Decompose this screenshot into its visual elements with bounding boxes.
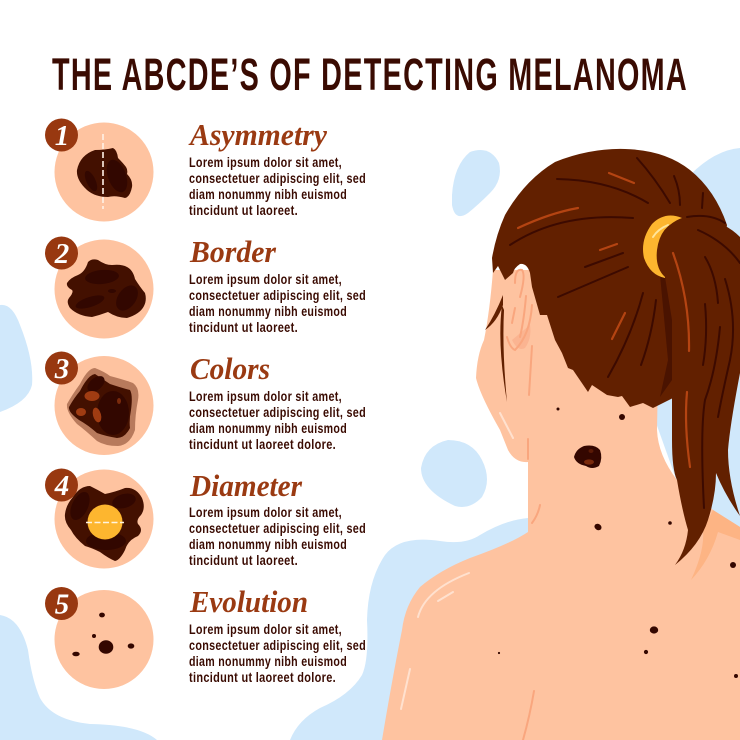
badge 5: 5 [55,588,69,620]
text block 4: tincidunt ut laoreet. [189,552,298,568]
panel: diameter [45,468,366,568]
text block 3: Lorem ipsum dolor sit amet, [189,388,342,404]
body skin [382,270,740,740]
text block 1: consectetuer adipiscing elit, sed [189,170,366,186]
main hair [492,149,727,408]
heading: colors: Colors [190,351,270,386]
text block 4 [189,504,366,568]
text block 3: diam nonummy nibh euismod [189,420,347,436]
skin circle 5 [54,590,154,689]
mole 2 [67,259,146,318]
moles 5 [72,613,134,656]
woman illustration [382,149,740,740]
text block 2: tincidunt ut laoreet. [189,319,298,335]
heading: border: Border [189,234,277,269]
hair shadow [660,275,677,397]
badge 5 [45,587,78,620]
text block 5: Lorem ipsum dolor sit amet, [189,621,342,637]
text block 2: Lorem ipsum dolor sit amet, [189,271,342,287]
text block 2: diam nonummy nibh euismod [189,303,347,319]
text block 5: diam nonummy nibh euismod [189,653,347,669]
badge 4 [45,468,78,502]
skin lines [507,270,540,740]
skin highlights [401,413,513,709]
mole 4 [65,486,144,561]
text block 1: Lorem ipsum dolor sit amet, [189,154,342,170]
symmetry line [102,134,104,209]
badge 2: 2 [54,238,69,270]
text block 3: tincidunt ut laoreet dolore. [189,436,336,452]
text block 1: diam nonummy nibh euismod [189,186,347,202]
ponytail [657,219,740,565]
text block 4: consectetuer adipiscing elit, sed [189,520,366,536]
text block 4: Lorem ipsum dolor sit amet, [189,504,342,520]
hair tie [643,216,682,278]
badge 1 [45,118,78,152]
background blue blobs [0,148,740,740]
orange hair strands [518,173,690,467]
text block 2 [189,271,366,335]
badge 1: 1 [55,120,69,152]
badge 4: 4 [54,470,69,502]
text block 3 [189,388,366,452]
badge 3: 3 [54,353,69,385]
skin circle 4 [54,470,154,568]
neck and back moles [498,408,738,678]
skin circle 3 [54,356,154,455]
panel: asymmetry [45,117,366,222]
text block 5: tincidunt ut laoreet dolore. [189,669,336,685]
panel: colors [45,351,366,455]
heading: evolution: Evolution [189,584,308,619]
skin circle 2 [54,240,154,338]
text block 5 [189,621,366,685]
ear shading [512,325,530,349]
panel: evolution [45,584,366,689]
heading: diameter: Diameter [189,468,303,503]
diameter line [86,522,124,524]
text block 2: consectetuer adipiscing elit, sed [189,287,366,303]
text block 5: consectetuer adipiscing elit, sed [189,637,366,653]
ruler circle [88,504,122,540]
mole 1 [77,148,132,198]
badge 2 [45,236,78,270]
badge 3 [45,352,78,385]
shoulder shadow [691,510,740,580]
text block 1: tincidunt ut laoreet. [189,202,298,218]
text block 4: diam nonummy nibh euismod [189,536,347,552]
hair wisps [485,295,507,402]
skin circle 1 [54,122,154,222]
panel: border [45,234,366,338]
heading: asymmetry: Asymmetry [188,117,327,152]
dark hair strands [510,158,740,508]
text block 1 [189,154,366,218]
large mole on neck [574,446,601,468]
mole 3 [67,368,138,446]
text block 3: consectetuer adipiscing elit, sed [189,404,366,420]
